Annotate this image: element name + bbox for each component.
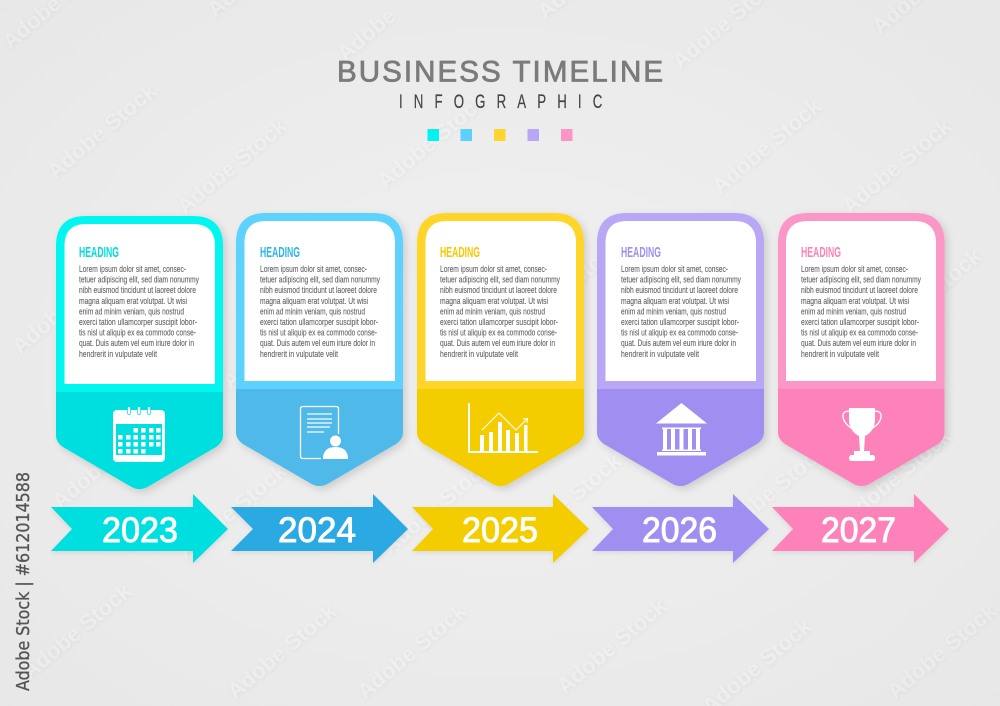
body text 2027: magna aliquam erat volutpat. Ut wisi <box>801 296 909 306</box>
panel: 2024 <box>231 213 408 563</box>
watermark pattern: Adobe Stock <box>707 93 827 199</box>
body text 2026: tetuer adipiscing elit, sed diam nonummy <box>621 275 741 285</box>
icon: bank building <box>656 403 707 456</box>
watermark pattern: Adobe Stock <box>17 578 137 684</box>
body text 2026: tis nisl ut aliquip ex ea commodo conse- <box>621 328 738 338</box>
body text 2024: Lorem ipsum dolor sit amet, consec- <box>260 264 367 274</box>
icon: trophy <box>843 408 881 461</box>
arrow: 2025 <box>412 494 589 563</box>
year 2027: 2027 <box>821 510 896 550</box>
body text 2027: enim ad minim veniam, quis nostrud <box>801 306 906 316</box>
body text 2027: exerci tation ullamcorper suscipit lobor- <box>801 317 919 327</box>
card shape 2023 <box>56 216 223 489</box>
icon: document with person <box>300 406 348 459</box>
body text 2025: quat. Duis autem vel eum iriure dolor in <box>440 338 555 348</box>
body text 2027: tetuer adipiscing elit, sed diam nonummy <box>801 275 921 285</box>
body text 2025: magna aliquam erat volutpat. Ut wisi <box>440 296 548 306</box>
watermark pattern: Adobe Stock <box>372 88 492 194</box>
watermark pattern: Adobe Stock <box>172 458 292 564</box>
panel: 2027 <box>772 213 949 563</box>
body text 2025: nibh euismod tincidunt ut laoreet dolore <box>440 285 557 295</box>
body text 2026: magna aliquam erat volutpat. Ut wisi <box>621 296 729 306</box>
body text 2025: hendrerit in vulputate velit <box>440 349 518 359</box>
watermark pattern: Adobe Stock <box>837 113 957 219</box>
body text 2026: Lorem ipsum dolor sit amet, consec- <box>621 264 728 274</box>
body text 2027 <box>801 264 921 359</box>
watermark pattern: Adobe Stock <box>882 598 1000 704</box>
watermark pattern: Adobe Stock <box>507 448 627 554</box>
watermark pattern: Adobe Stock <box>837 423 957 529</box>
body text 2027: quat. Duis autem vel eum iriure dolor in <box>801 338 916 348</box>
card shape 2025 <box>417 213 584 486</box>
body text 2026: exerci tation ullamcorper suscipit lobor- <box>621 317 739 327</box>
watermark pattern: Adobe Stock <box>867 243 987 349</box>
year 2025: 2025 <box>462 510 538 550</box>
body text 2027: Lorem ipsum dolor sit amet, consec- <box>801 264 908 274</box>
watermark pattern: Adobe Stock <box>172 113 292 219</box>
watermark pattern: Adobe Stock <box>42 78 162 184</box>
card shape 2026 <box>597 213 764 486</box>
icon: calendar <box>113 406 165 462</box>
body text 2026: enim ad minim veniam, quis nostrud <box>621 306 726 316</box>
title: BUSINESS TIMELINE <box>337 56 663 88</box>
subtitle: INFOGRAPHIC <box>399 90 602 113</box>
body text 2024: magna aliquam erat volutpat. Ut wisi <box>260 296 368 306</box>
body text 2024 <box>260 264 380 359</box>
body text 2024: nibh euismod tincidunt ut laoreet dolore <box>260 285 377 295</box>
card shape 2027 <box>778 213 944 486</box>
year 2026: 2026 <box>642 510 717 550</box>
body text 2025: Lorem ipsum dolor sit amet, consec- <box>440 264 547 274</box>
year 2024: 2024 <box>278 510 356 550</box>
arrow: 2027 <box>772 494 949 563</box>
heading 2024: HEADING <box>260 244 300 261</box>
watermark pattern: Adobe Stock <box>552 593 672 699</box>
body text 2026: quat. Duis autem vel eum iriure dolor in <box>621 338 736 348</box>
body text 2023: hendrerit in vulputate velit <box>79 349 157 359</box>
body text 2025 <box>440 264 560 359</box>
body text 2026: hendrerit in vulputate velit <box>621 349 699 359</box>
arrow: 2023 <box>51 494 228 563</box>
heading 2025: HEADING <box>440 244 480 261</box>
body text 2025: exerci tation ullamcorper suscipit lobor- <box>440 317 558 327</box>
arrow: 2024 <box>231 494 408 563</box>
body text 2027: hendrerit in vulputate velit <box>801 349 879 359</box>
panel: 2023 <box>51 216 228 563</box>
watermark pattern: Adobe Stock <box>352 598 472 704</box>
body text 2027: nibh euismod tincidunt ut laoreet dolore <box>801 285 918 295</box>
body text 2024: quat. Duis autem vel eum iriure dolor in <box>260 338 375 348</box>
watermark pattern: Adobe Stock <box>7 253 127 359</box>
watermark pattern: Adobe Stock <box>47 408 167 514</box>
watermark pattern: Adobe Stock <box>217 288 337 394</box>
heading 2027: HEADING <box>801 244 841 261</box>
body text 2023 <box>79 264 199 359</box>
heading 2023: HEADING <box>79 244 119 261</box>
arrow: 2026 <box>592 494 769 563</box>
body text 2023: enim ad minim veniam, quis nostrud <box>79 306 184 316</box>
icon: bar chart with trend line <box>469 403 538 452</box>
watermark pattern: Adobe Stock <box>712 438 832 544</box>
body text 2024: enim ad minim veniam, quis nostrud <box>260 306 365 316</box>
body text 2023: magna aliquam erat volutpat. Ut wisi <box>79 296 187 306</box>
body text 2026: nibh euismod tincidunt ut laoreet dolore <box>621 285 738 295</box>
body text 2023: quat. Duis autem vel eum iriure dolor in <box>79 338 194 348</box>
body text 2024: tis nisl ut aliquip ex ea commodo conse- <box>260 328 377 338</box>
body text 2023: nibh euismod tincidunt ut laoreet dolore <box>79 285 196 295</box>
colour legend squares <box>428 129 572 141</box>
body text 2023: tis nisl ut aliquip ex ea commodo conse- <box>79 328 196 338</box>
body text 2024: tetuer adipiscing elit, sed diam nonummy <box>260 275 380 285</box>
heading 2026: HEADING <box>621 244 661 261</box>
body text 2026 <box>621 264 741 359</box>
watermark pattern: Adobe Stock <box>222 598 342 704</box>
year 2023: 2023 <box>102 510 178 550</box>
panel: 2026 <box>592 213 769 563</box>
body text 2024: exerci tation ullamcorper suscipit lobor- <box>260 317 378 327</box>
body text 2023: Lorem ipsum dolor sit amet, consec- <box>79 264 186 274</box>
body text 2025: tetuer adipiscing elit, sed diam nonummy <box>440 275 560 285</box>
stock id side label: Adobe Stock | #612014588 <box>13 472 34 691</box>
body text 2023: tetuer adipiscing elit, sed diam nonummy <box>79 275 199 285</box>
watermark pattern: Adobe Stock <box>377 453 497 559</box>
body text 2027: tis nisl ut aliquip ex ea commodo conse- <box>801 328 918 338</box>
watermark pattern: Adobe <box>332 3 401 66</box>
body text 2023: exerci tation ullamcorper suscipit lobor- <box>79 317 197 327</box>
body text 2025: enim ad minim veniam, quis nostrud <box>440 306 545 316</box>
card shape 2024 <box>236 213 403 486</box>
watermark pattern: Adobe Stock <box>507 233 627 339</box>
panel: 2025 <box>412 213 589 563</box>
body text 2024: hendrerit in vulputate velit <box>260 349 338 359</box>
body text 2025: tis nisl ut aliquip ex ea commodo conse- <box>440 328 557 338</box>
